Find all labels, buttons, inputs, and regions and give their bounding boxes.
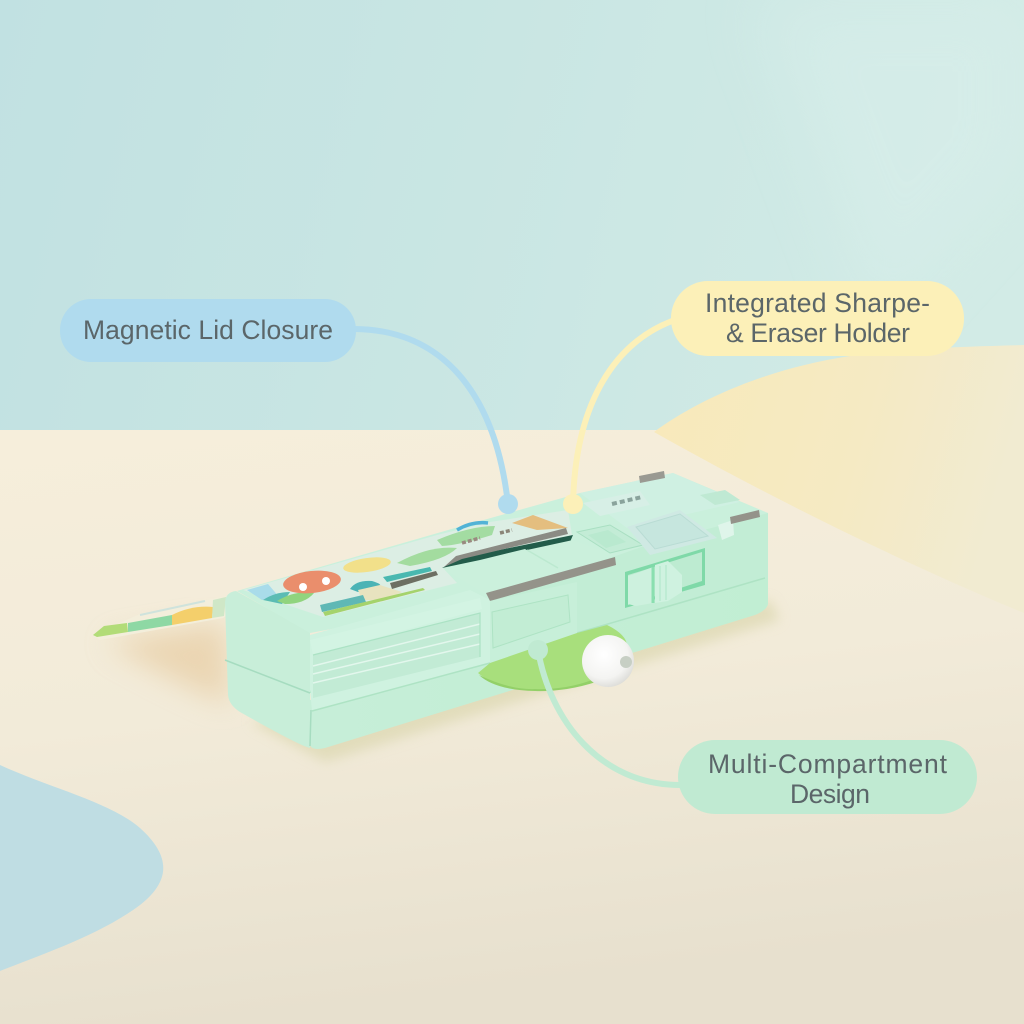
slider switch bbox=[625, 548, 705, 608]
background wall bbox=[0, 0, 1024, 431]
metal bar bbox=[486, 557, 616, 601]
callout: Multi-Compartment Design: Design bbox=[790, 779, 870, 809]
green half disc and bead bbox=[478, 625, 634, 691]
callout: Multi-Compartment Design bbox=[678, 740, 977, 814]
leader line: magnetic lid bbox=[355, 329, 518, 514]
open lid with illustration bbox=[93, 505, 570, 640]
callout: Magnetic Lid Closure: Magnetic Lid Closure bbox=[83, 315, 333, 345]
body top surface bbox=[237, 473, 768, 633]
grass patches bbox=[320, 595, 366, 612]
yellow character bbox=[342, 555, 392, 575]
right-side compartment and clear window bbox=[577, 490, 740, 555]
printed illustration on top bbox=[243, 510, 572, 617]
callout: Integrated Sharpener & Eraser Holder: & Eraser Holder bbox=[726, 318, 910, 348]
teal character bbox=[350, 581, 380, 592]
body lower front face bbox=[310, 570, 768, 749]
product: pencil case bbox=[93, 471, 780, 762]
centre raised top bbox=[445, 540, 615, 597]
background floor bbox=[0, 430, 1024, 1024]
callout: Magnetic Lid Closure bbox=[60, 299, 356, 362]
callout: Multi-Compartment Design: Multi-Compartment bbox=[708, 749, 948, 779]
callout: Integrated Sharpener & Eraser Holder: Integrated Sharpe- bbox=[705, 288, 930, 318]
shadows bbox=[105, 600, 780, 762]
raised centre panel bbox=[490, 582, 577, 663]
front left ribbed panel bbox=[310, 590, 490, 711]
lid slot and metal hinge bbox=[442, 528, 573, 568]
yellow backdrop shape bbox=[654, 345, 1024, 613]
orange character bbox=[282, 568, 342, 596]
callout: Integrated Sharpener & Eraser Holder bbox=[671, 281, 964, 356]
leader line: compartments bbox=[528, 640, 680, 785]
metal pins bbox=[639, 471, 760, 524]
body upper front face bbox=[490, 512, 768, 663]
leader line: sharpener holder bbox=[563, 321, 672, 514]
body left end face bbox=[225, 591, 310, 748]
blue floor shape bbox=[0, 765, 163, 971]
